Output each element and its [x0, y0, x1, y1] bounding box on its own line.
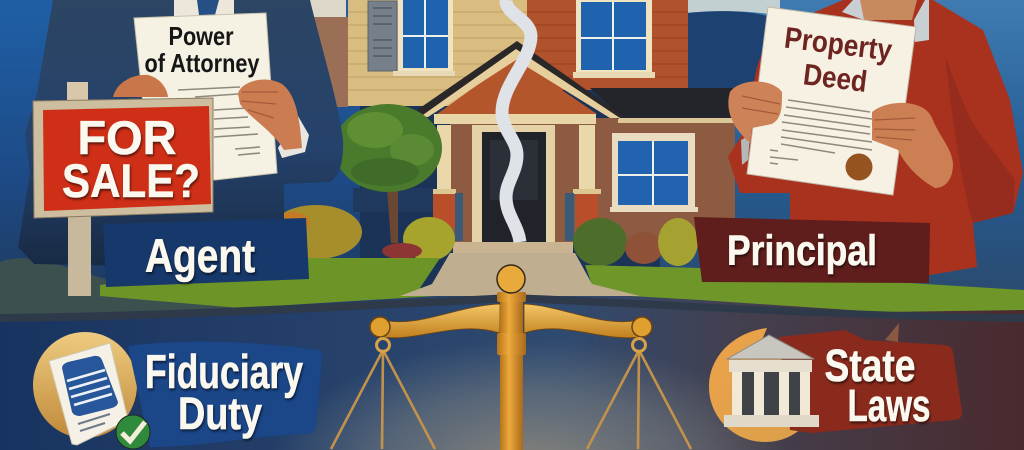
- icon: document: [49, 343, 128, 445]
- power of attorney subtitle: of Attorney: [144, 48, 260, 78]
- agent: suit: [18, 0, 343, 268]
- sign panel: [43, 106, 211, 211]
- door: [472, 125, 555, 242]
- brown shard: [885, 323, 899, 342]
- for sale text: [62, 111, 200, 207]
- scales: right chains: [587, 350, 691, 449]
- for sale text: FOR: [78, 111, 176, 164]
- house: right brick upper: [527, 0, 688, 90]
- scales: finial: [497, 265, 525, 293]
- agent figure: [18, 0, 343, 268]
- shrubs left: [270, 205, 455, 261]
- roof: gable trim: [420, 49, 620, 118]
- house: left siding: [348, 0, 528, 106]
- state laws circle: [709, 328, 817, 442]
- tree: [334, 104, 442, 243]
- background: pale horizon top right: [686, 0, 780, 16]
- house: [348, 0, 735, 253]
- background: underground light glow: [270, 340, 790, 450]
- scales: left ring: [370, 317, 390, 352]
- for sale text: SALE?: [62, 154, 200, 207]
- background: dark blue building right: [686, 11, 770, 120]
- house: shutter: [368, 1, 397, 71]
- deed seal: [846, 154, 872, 180]
- fiduciary banner: [128, 342, 322, 447]
- background: brown building left: [314, 17, 348, 107]
- principal hand right: [872, 103, 953, 188]
- sign post: [67, 82, 91, 296]
- window: upper left: [393, 0, 455, 76]
- crack between halves: [502, 0, 531, 242]
- roof: right side: [590, 88, 735, 118]
- agent: tie: [197, 0, 219, 15]
- principal figure: [728, 0, 1023, 275]
- scales: column: [497, 292, 526, 450]
- icon: courthouse: [724, 335, 819, 427]
- document: property deed: [747, 7, 916, 195]
- background: left sky: [0, 0, 360, 300]
- badge: fiduciary duty: [33, 332, 322, 449]
- ground band: [0, 294, 1024, 322]
- state laws text: State: [824, 340, 916, 391]
- principal: neck: [857, 0, 917, 20]
- window: lower right: [610, 133, 698, 212]
- steps: [453, 242, 573, 253]
- background: right sky: [660, 0, 1024, 300]
- document: power of attorney: [134, 13, 277, 180]
- lawn: right: [560, 265, 1024, 312]
- background: underground: [0, 295, 1024, 450]
- scales of justice: [331, 265, 691, 450]
- deed title line 2: Deed: [801, 58, 869, 99]
- roof: gable dark edge: [417, 41, 622, 119]
- banner: principal: Principal: [727, 227, 877, 275]
- principal: sweater shadow: [945, 55, 1015, 223]
- window: upper right: [573, 0, 655, 78]
- porch beam: [434, 114, 596, 124]
- icon: check badge: [116, 415, 150, 449]
- banner: agent: [103, 218, 309, 287]
- state laws text: [824, 340, 930, 431]
- sign: for sale: [33, 82, 213, 296]
- banner: principal: [694, 217, 930, 283]
- state laws banner: [779, 330, 962, 433]
- banner: agent: Agent: [145, 229, 255, 282]
- fiduciary text: Duty: [178, 388, 262, 439]
- scales: right ring: [632, 317, 652, 352]
- deed title line 1: Property: [783, 22, 894, 68]
- fiduciary text: [145, 345, 303, 439]
- shrubs right: [573, 218, 698, 266]
- scales: beam: [382, 304, 640, 338]
- agent: shirt: [174, 0, 234, 16]
- agent hand left: [113, 75, 168, 97]
- principal hand left: [728, 82, 782, 143]
- badge: state laws: [709, 323, 962, 442]
- agent: shirt cuff: [278, 116, 309, 158]
- column left: [429, 125, 456, 228]
- principal: sweater: [728, 0, 1023, 275]
- trim under right roof: [618, 118, 735, 123]
- principal cuff left: [741, 135, 750, 165]
- column right: [573, 125, 601, 228]
- power of attorney title: Power: [168, 21, 234, 51]
- front path: [400, 253, 640, 296]
- lawn: [0, 253, 1024, 322]
- fiduciary text: Fiduciary: [145, 345, 303, 398]
- scales: left chains: [331, 350, 435, 449]
- roof: gable infill: [437, 58, 597, 114]
- sign frame: [33, 98, 213, 218]
- principal: collar: [842, 0, 929, 42]
- fiduciary circle: [33, 332, 137, 438]
- state laws text: Laws: [848, 380, 930, 431]
- porch planters: [455, 193, 574, 241]
- house: lower wall: [450, 118, 735, 242]
- lawn: dark grass left: [0, 258, 250, 316]
- agent hand right: [238, 79, 302, 150]
- lawn: left: [100, 258, 500, 308]
- background: pale wall left: [308, 0, 346, 20]
